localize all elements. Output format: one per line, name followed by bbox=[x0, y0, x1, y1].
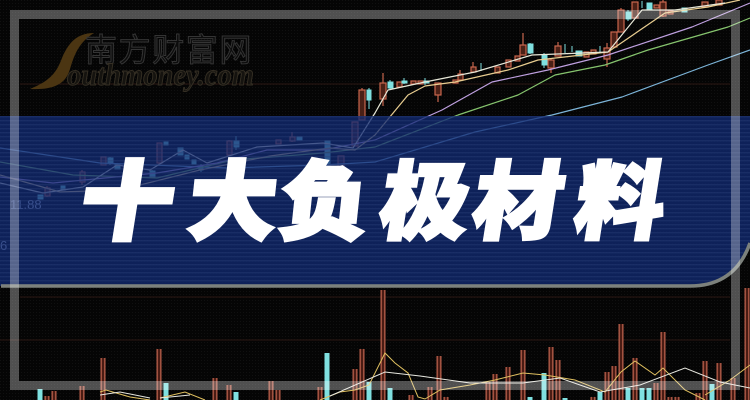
banner border bbox=[1, 243, 750, 286]
price labels bbox=[0, 197, 42, 253]
volume average lines bbox=[100, 353, 750, 400]
watermark url: outhmoney.com bbox=[67, 57, 254, 92]
title banner panel bbox=[0, 116, 750, 286]
title: 十大负极材料 bbox=[74, 155, 673, 251]
cyan candles bbox=[38, 1, 687, 199]
moving average lines bbox=[0, 0, 750, 193]
cyan volume bars bbox=[40, 353, 712, 400]
price labels: 11.88 bbox=[10, 197, 42, 212]
red candles bbox=[45, 0, 722, 197]
watermark logo: southmoney bbox=[30, 32, 254, 92]
watermark chinese name: 南方财富网 bbox=[85, 32, 253, 68]
logo swoosh bbox=[30, 33, 94, 89]
volume bars bbox=[40, 288, 750, 400]
title: 十大负极材料: 极 bbox=[373, 155, 478, 250]
title: 十大负极材料: 材 bbox=[466, 155, 571, 250]
title: 十大负极材料: 料 bbox=[568, 155, 673, 250]
title: 十大负极材料: 大 bbox=[185, 156, 281, 251]
candlestick chart bbox=[0, 0, 750, 253]
title: 十大负极材料: 负 bbox=[277, 156, 373, 251]
red volume bars bbox=[47, 288, 747, 400]
price labels: 6 bbox=[0, 238, 7, 253]
title: 十大负极材料: 十 bbox=[74, 155, 181, 250]
